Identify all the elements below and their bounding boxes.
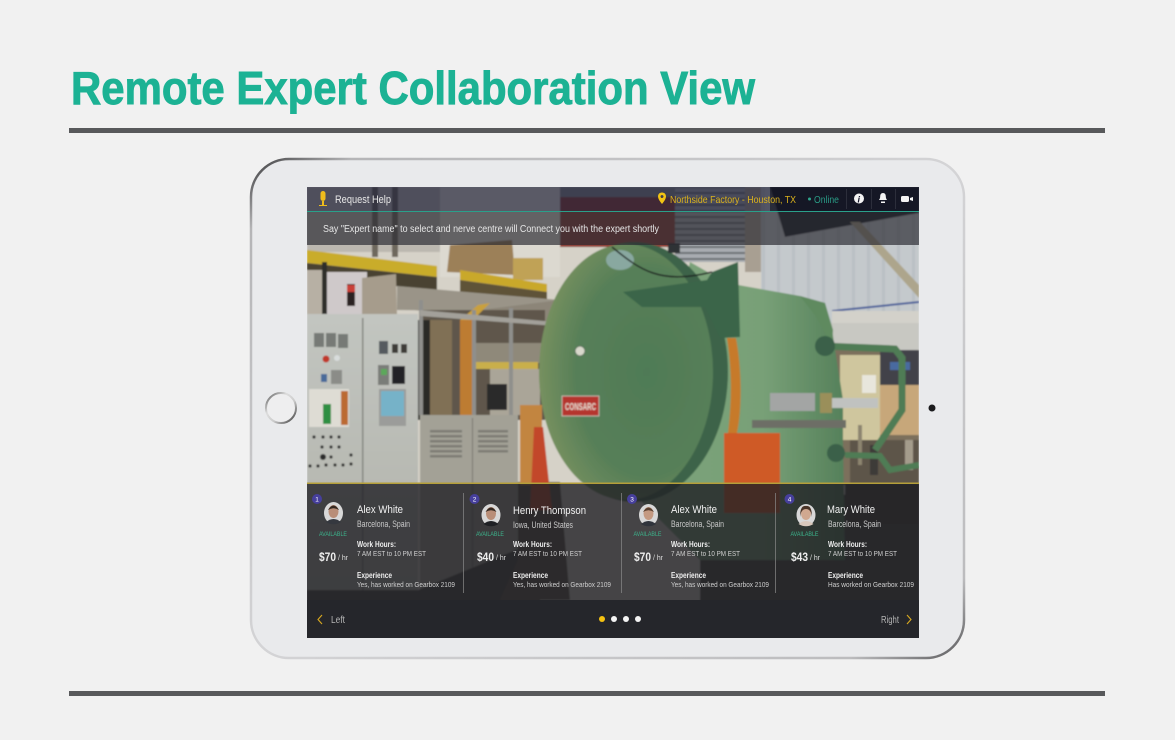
factory photo [307,187,919,638]
expert card 1: Work Hours: [357,539,396,549]
expert card 2: Work Hours: [513,539,552,549]
expert cards panel [307,482,919,600]
expert card 4 [784,494,914,589]
expert card 2: 2 [473,496,477,504]
expert card 2: Iowa, United States [513,520,573,530]
control cabinet [307,313,419,482]
footer navigation bar [307,600,919,638]
title: Remote Expert Collaboration View [71,62,755,114]
expert card 4: Experience [828,570,863,580]
expert card 3: Experience [671,570,706,580]
icon: right chevron [907,615,911,624]
expert card 3: $70 [634,550,651,564]
expert card 2: / hr [496,555,507,562]
right label: Right [881,615,899,626]
orange electrical box [724,433,780,513]
expert card 3: / hr [653,555,664,562]
icon: microphone [319,191,327,206]
expert card 3: 3 [630,496,634,504]
pressure vessel body [640,262,845,560]
expert card 1: Experience [357,570,392,580]
expert card 2: Yes, has worked on Gearbox 2109 [513,580,611,589]
icon: info [854,194,864,204]
orange cone and forklift [520,405,542,485]
expert card 4: Barcelona, Spain [828,519,881,529]
icon: camera [901,196,913,202]
vessel door [614,242,728,502]
expert card 1: AVAILABLE [319,532,347,538]
expert card 1 [312,494,455,589]
app screen [307,187,919,638]
instruction band [307,212,919,245]
expert card 1: $70 [319,550,336,564]
expert card 4: 7 AM EST to 10 PM EST [828,549,897,558]
expert card 3 [627,494,769,589]
expert card 2: Henry Thompson [513,505,586,517]
expert card 3: 7 AM EST to 10 PM EST [671,549,740,558]
warning light [347,284,355,306]
camera lens [928,404,936,412]
expert card 1: Alex White [357,504,403,516]
expert card 2 [470,494,611,589]
expert card 4: / hr [810,555,821,562]
expert card 2: $40 [477,550,494,564]
expert card 2: AVAILABLE [476,532,504,538]
expert card 1: Barcelona, Spain [357,519,410,529]
floor [307,550,540,600]
online status [808,196,838,203]
expert card 1: 7 AM EST to 10 PM EST [357,549,426,558]
tablet body [251,159,964,658]
expert card 1: 1 [315,496,319,504]
icon: left chevron [318,615,322,624]
icon: location pin [658,192,666,204]
expert card 4: Work Hours: [828,539,867,549]
expert card 3: Alex White [671,504,717,516]
pressure gauge [575,346,585,356]
expert card 2: Experience [513,570,548,580]
header overlay bar [307,187,919,211]
online status: Online [814,194,839,206]
instruction band: Say "Expert name" to select and nerve centre will Connect you with the expert shortly [323,224,659,235]
left label: Left [331,615,345,626]
icon: info: i [858,194,860,204]
expert card 4: 4 [788,496,792,504]
location label: Northside Factory - Houston, TX [670,194,796,206]
expert card 4: Has worked on Gearbox 2109 [828,580,914,589]
tablet mockup [251,159,964,658]
request help label: Request Help [335,194,391,206]
pagination dots [599,616,641,622]
pipes and cylinders [770,393,815,411]
background frame and chair [420,310,545,420]
expert card 1: / hr [338,555,349,562]
expert card 3: Barcelona, Spain [671,519,724,529]
expert card 3: AVAILABLE [634,532,662,538]
expert card 4: $43 [791,550,808,564]
icon: bell [879,193,887,203]
home button [266,393,296,423]
steel cabinet [420,415,518,590]
expert card 2: 7 AM EST to 10 PM EST [513,549,582,558]
factory photo: CONSARC [565,402,596,413]
door seal [727,338,741,433]
process diagram panel [309,389,349,427]
expert card 4: Mary White [827,504,875,516]
manufacturer sign [562,396,599,416]
door bracket [623,262,740,338]
expert card 3: Yes, has worked on Gearbox 2109 [671,580,769,589]
yellow racks and storage [372,187,378,257]
expert card 1: Yes, has worked on Gearbox 2109 [357,580,455,589]
expert card 4: AVAILABLE [790,532,818,538]
control screen [379,389,406,426]
expert card 3: Work Hours: [671,539,710,549]
